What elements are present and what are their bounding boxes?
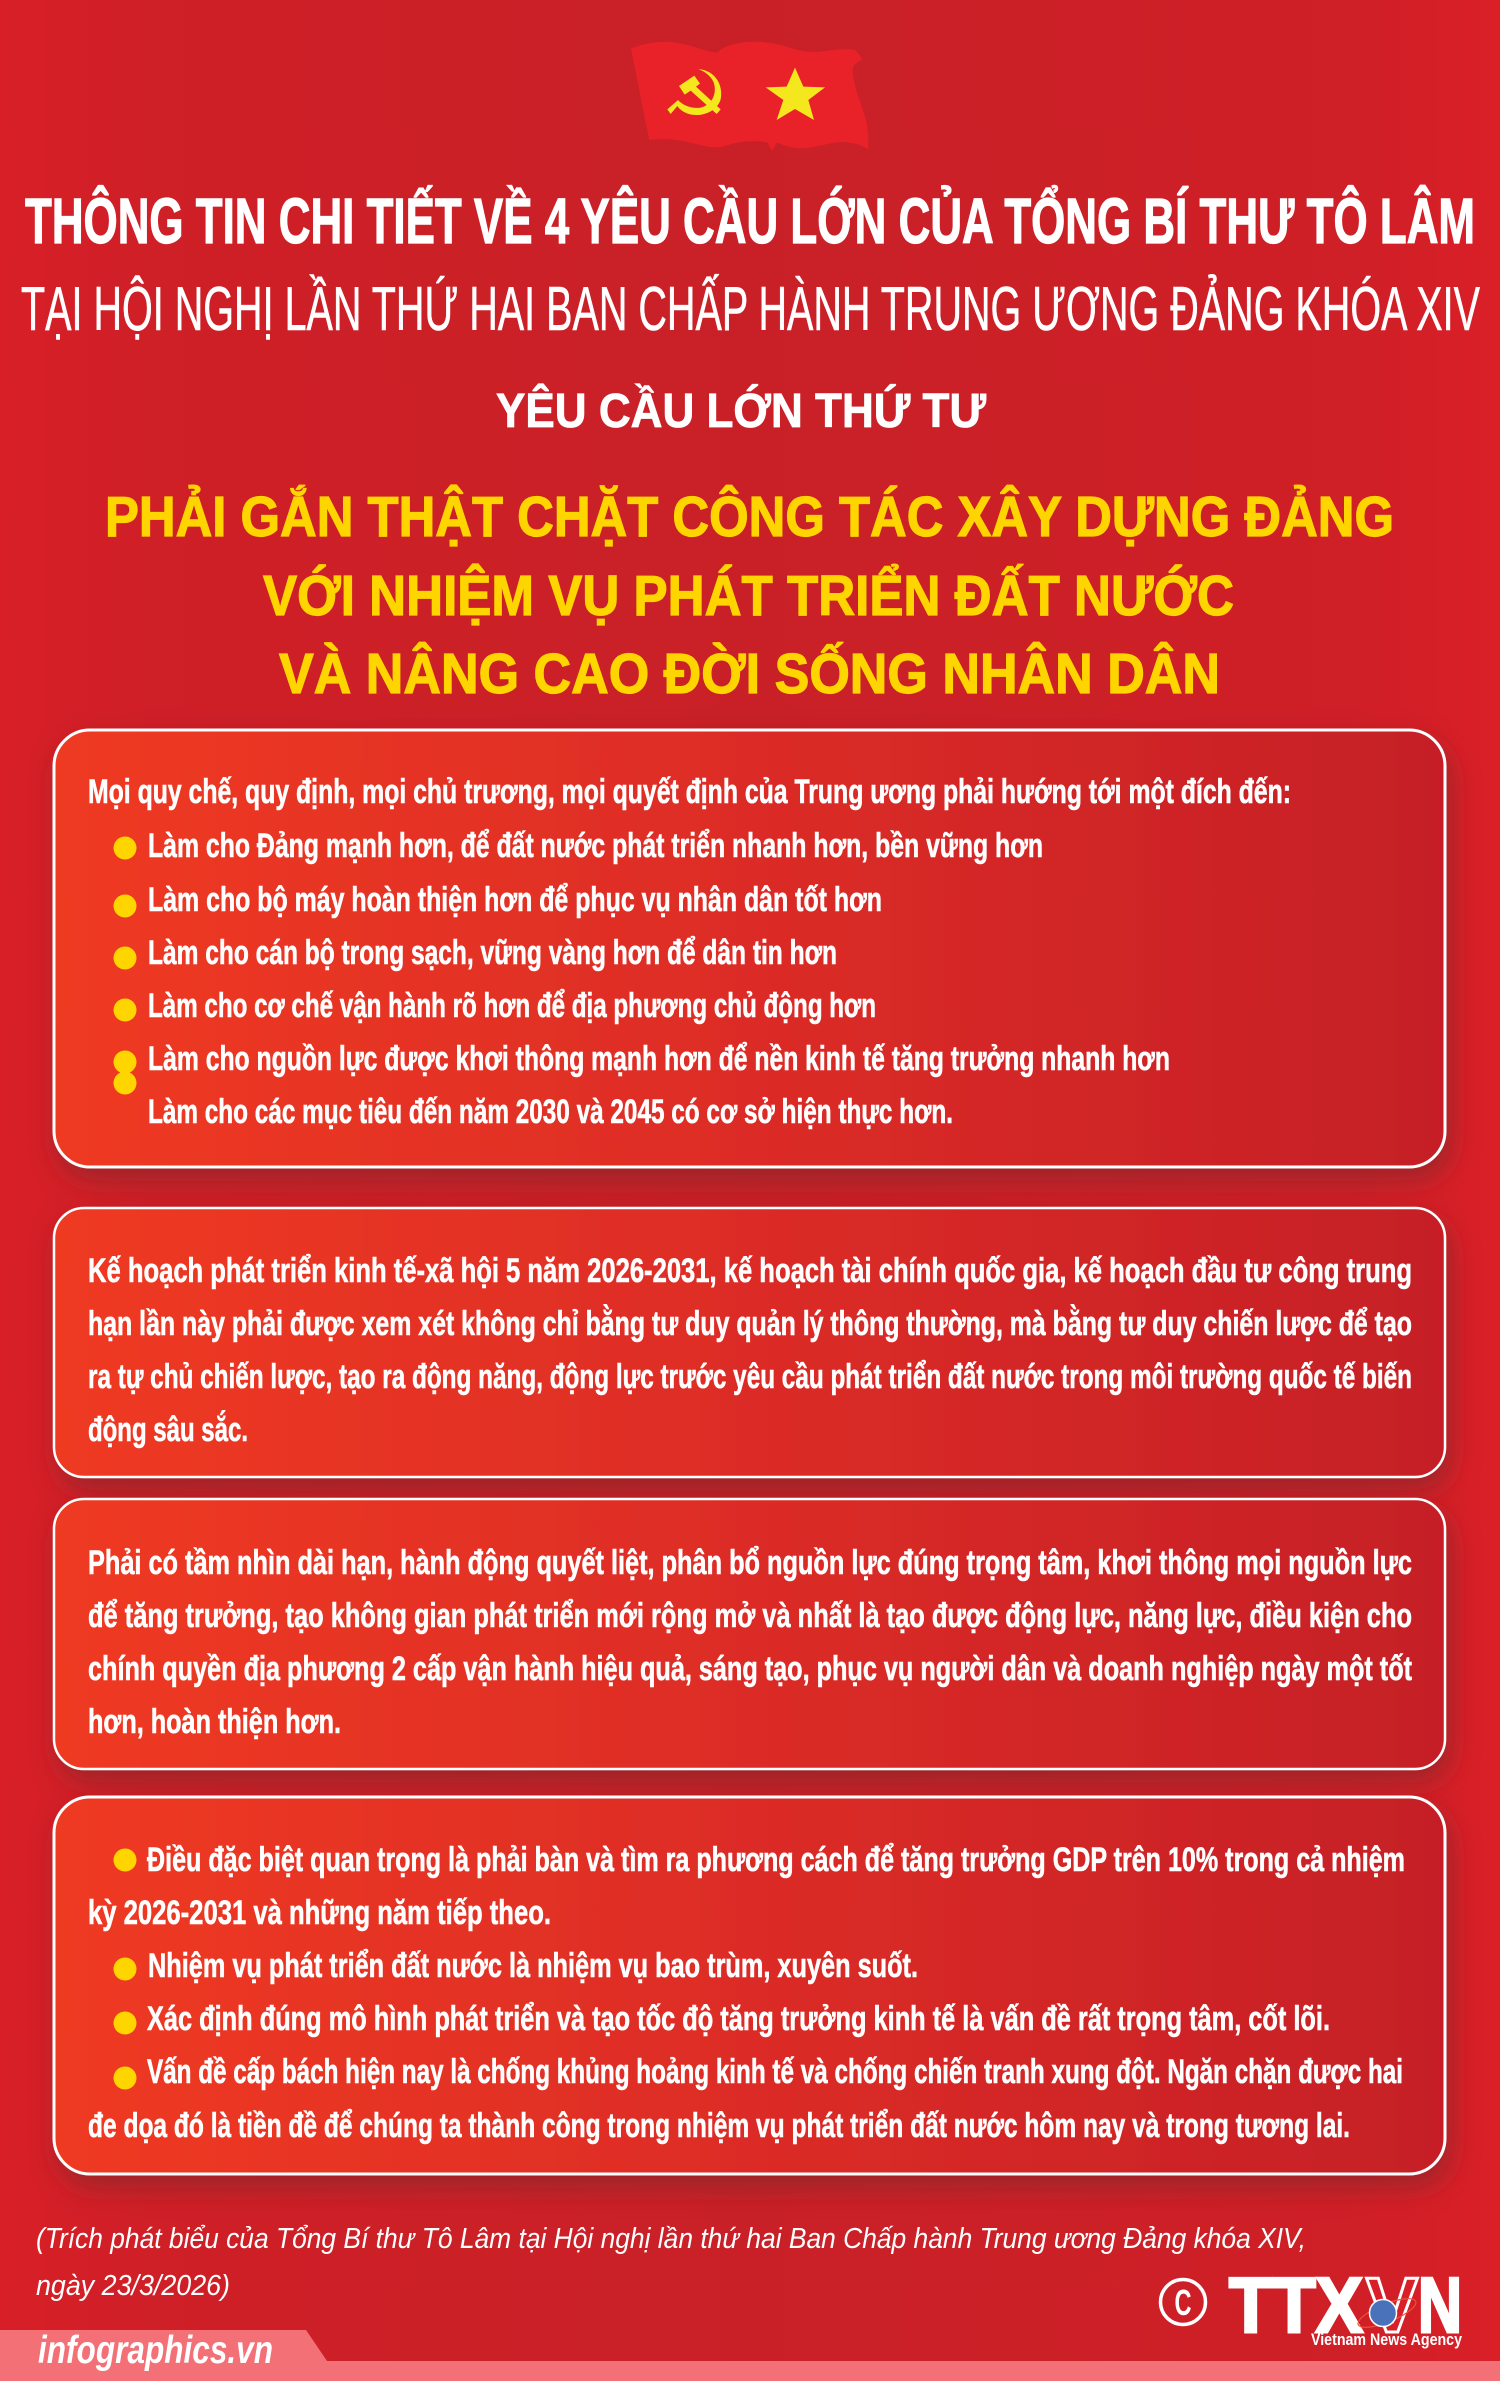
panel: GDP growth and priorities [54,1797,1445,2174]
source note [36,2223,1306,2302]
source note: ngày 23/3/2026) [36,2270,230,2302]
bullet item: GDP growth: kỳ 2026-2031 và những năm tiếp theo. [88,1894,551,1932]
panel text [88,1544,1412,1741]
bullet item 4: Làm cho cơ chế vận hành rõ hơn để địa phương chủ động hơn [148,987,876,1025]
bullet item 4 [114,987,876,1025]
bullet item 1: Làm cho Đảng mạnh hơn, để đất nước phát triển nhanh hơn, bền vững hơn [148,827,1043,865]
logo: copyright mark: C [1174,2282,1192,2323]
headline: yellow requirement statement [105,484,1394,706]
bullet item: overarching task: Nhiệm vụ phát triển đất nước là nhiệm vụ bao trùm, xuyên suốt. [148,1947,918,1985]
bullet item 3 [114,934,837,972]
logo: TTXVN Vietnam News Agency [1229,2261,1462,2349]
panel: purpose of decisions [54,730,1445,1167]
logo: TTXVN Vietnam News Agency: TTX [1229,2261,1363,2349]
panel: socio-economic plans [54,1208,1445,1477]
bullet item: urgent issues [88,2053,1403,2145]
panel text: động sâu sắc. [88,1411,248,1449]
bullet item 2: Làm cho bộ máy hoàn thiện hơn để phục vụ nhân dân tốt hơn [148,881,882,919]
panel text [88,1252,1412,1449]
logo: copyright mark [1160,2280,1206,2324]
headline: yellow requirement statement: VỚI NHIỆM VỤ PHÁT TRIỂN ĐẤT NƯỚC [263,563,1234,628]
bullet item 3: Làm cho cán bộ trong sạch, vững vàng hơn để dân tin hơn [148,934,837,972]
bullet item: GDP growth [88,1841,1405,1932]
panel: long-term vision [54,1499,1445,1769]
bullet item 6 [114,1072,953,1131]
source note: (Trích phát biểu của Tổng Bí thư Tô Lâm tại Hội nghị lần thứ hai Ban Chấp hành Trung ương Đảng khóa XIV, [36,2223,1306,2255]
bullet item 6: Làm cho các mục tiêu đến năm 2030 và 2045 có cơ sở hiện thực hơn. [148,1093,953,1131]
logo: TTXVN Vietnam News Agency: Vietnam News Agency [1311,2330,1462,2349]
panel text: hơn, hoàn thiện hơn. [88,1703,341,1741]
logo: TTXVN Vietnam News Agency: V [1366,2261,1418,2349]
subheading: requirement number: YÊU CẦU LỚN THỨ TƯ [496,383,986,438]
footer band [0,2330,1500,2381]
headline: yellow requirement statement: VÀ NÂNG CAO ĐỜI SỐNG NHÂN DÂN [279,641,1220,706]
icon: party and national flag [631,42,868,151]
logo: TTXVN Vietnam News Agency: N [1418,2261,1462,2349]
website label: infographics.vn [38,2329,273,2372]
